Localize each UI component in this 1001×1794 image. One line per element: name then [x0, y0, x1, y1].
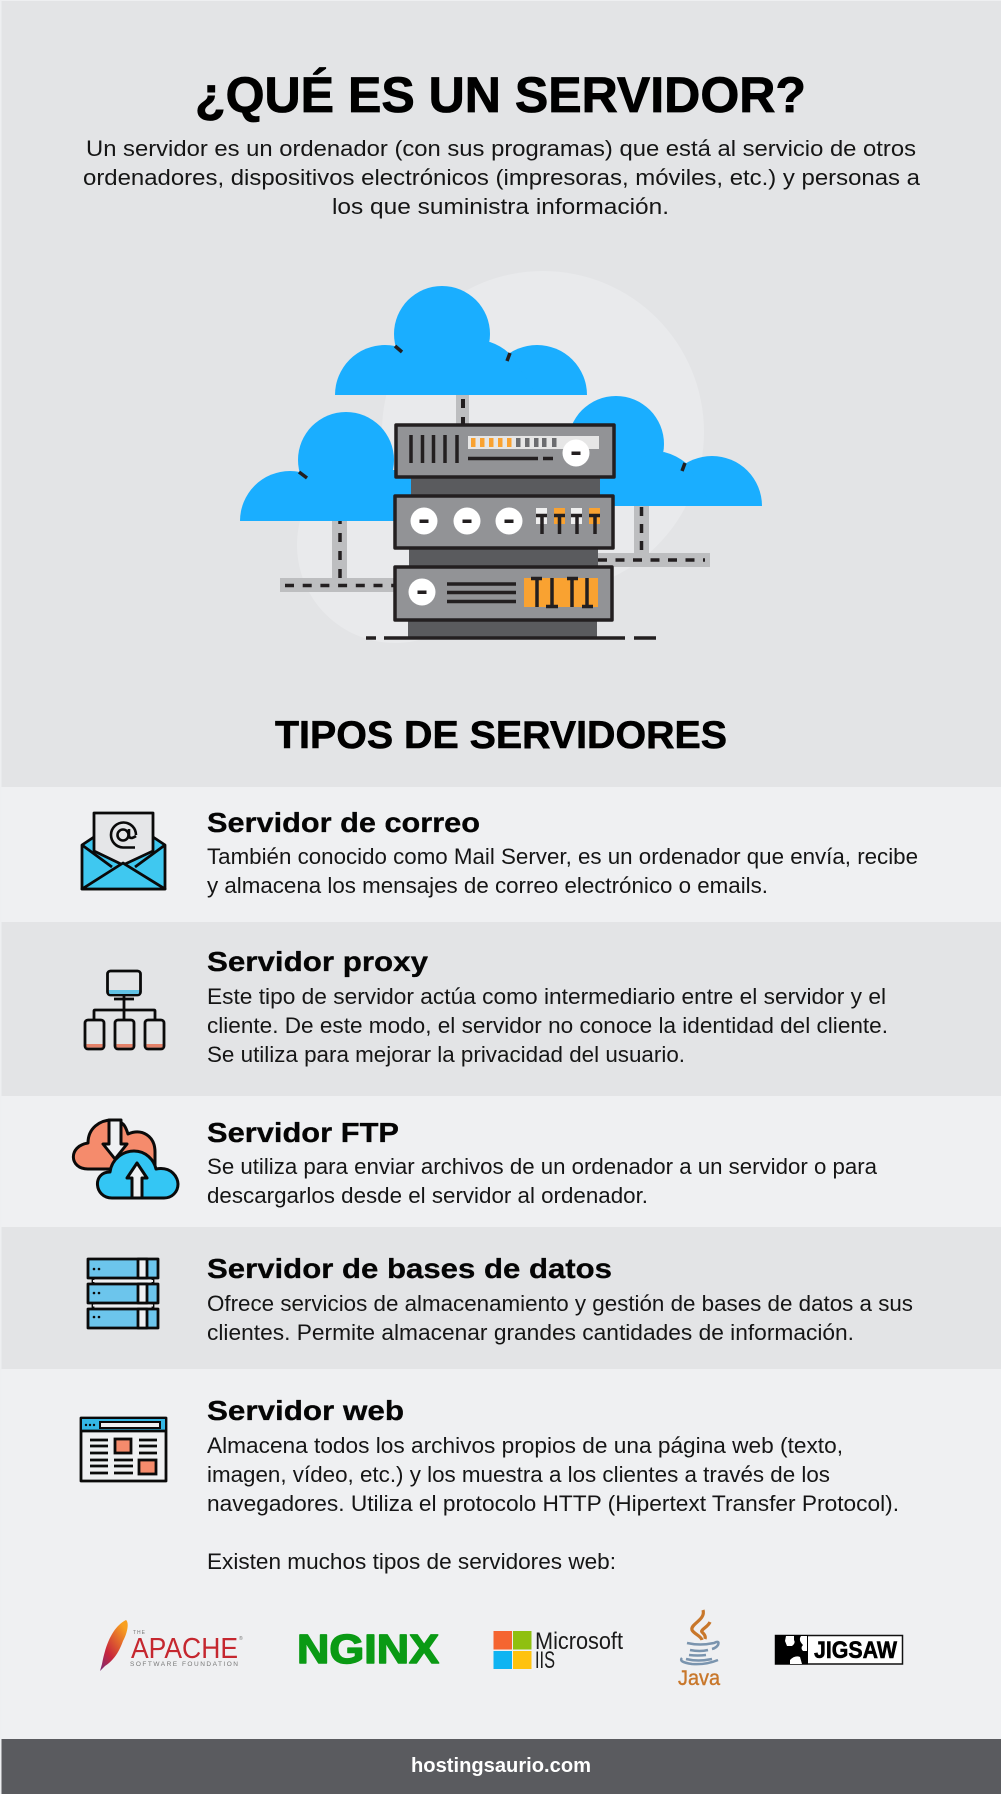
icon: mail envelope [82, 813, 165, 889]
heading: Servidor FTP [207, 1117, 399, 1148]
icon: upload and download clouds [73, 1120, 178, 1198]
icon: network [85, 971, 164, 1049]
heading: Servidor de bases de datos [207, 1253, 612, 1284]
logo: java: Java [678, 1667, 720, 1690]
footer [2, 1739, 1001, 1794]
connector: top cloud [456, 395, 469, 426]
description: También conocido como Mail Server, es un ordenador que envía, recibe [207, 844, 918, 869]
panel: servidor de correo [2, 787, 1001, 922]
panel: servidor ftp [2, 1096, 1001, 1227]
description: navegadores. Utiliza el protocolo HTTP (Hipertext Transfer Protocol). [207, 1491, 899, 1516]
description: Ofrece servicios de almacenamiento y gestión de bases de datos a sus [207, 1291, 913, 1316]
description: Se utiliza para enviar archivos de un ordenador a un servidor o para [207, 1154, 878, 1179]
logo: microsoft iis: IIS [535, 1647, 555, 1674]
icon: database stack [88, 1259, 158, 1328]
description: descargarlos desde el servidor al ordenador. [207, 1183, 648, 1208]
description [207, 1291, 913, 1345]
logo: jigsaw: JIGSAW [814, 1637, 897, 1664]
description [207, 1433, 899, 1516]
heading: Servidor web [207, 1395, 404, 1426]
heading: tipos de servidores: TIPOS DE SERVIDORES [275, 714, 727, 757]
description [207, 984, 888, 1067]
server unit 3 [395, 567, 612, 620]
logo: nginx: NGINX [297, 1626, 439, 1672]
description: Se utiliza para mejorar la privacidad del usuario. [207, 1042, 685, 1067]
intro paragraph: ordenadores, dispositivos electrónicos (impresoras, móviles, etc.) y personas a [83, 165, 921, 190]
panel: servidor proxy [2, 922, 1001, 1096]
web servers intro line: Existen muchos tipos de servidores web: [207, 1549, 616, 1574]
intro paragraph: Un servidor es un ordenador (con sus programas) que está al servicio de otros [86, 136, 916, 161]
logo: microsoft iis: Microsoft [535, 1628, 623, 1655]
logo: apache: ® [239, 1635, 243, 1642]
connector: left cloud [280, 521, 396, 592]
server rack bases [408, 476, 600, 638]
logo: jigsaw [775, 1635, 902, 1664]
logo: java [678, 1610, 720, 1690]
intro paragraph [83, 136, 921, 219]
connector: right cloud [598, 506, 710, 567]
footer: hostingsaurio.com [411, 1755, 591, 1777]
description: Almacena todos los archivos propios de una página web (texto, [207, 1433, 843, 1458]
logo: apache: SOFTWARE FOUNDATION [130, 1661, 238, 1668]
description [207, 844, 918, 898]
description [207, 1154, 878, 1208]
panel: servidor de bases de datos [2, 1227, 1001, 1369]
heading: Servidor proxy [207, 946, 428, 977]
cloud: left [240, 412, 420, 521]
cloud: right [568, 396, 762, 506]
icon: browser window [81, 1418, 166, 1481]
logo: apache: THE [133, 1630, 146, 1636]
description: y almacena los mensajes de correo electrónico o emails. [207, 873, 768, 898]
description: imagen, vídeo, etc.) y los muestra a los clientes a través de los [207, 1462, 830, 1487]
title: ¿QUÉ ES UN SERVIDOR? [195, 67, 806, 123]
illustration: servers and clouds [240, 271, 762, 643]
description: Este tipo de servidor actúa como intermediario entre el servidor y el [207, 984, 886, 1009]
intro paragraph: los que suministra información. [332, 194, 669, 219]
server unit 2 [395, 496, 613, 548]
panel: servidor web [2, 1369, 1001, 1739]
ground line [366, 636, 656, 640]
logo: microsoft iis [494, 1628, 623, 1674]
server unit 1 [396, 425, 614, 477]
logo: apache: APACHE [131, 1633, 238, 1665]
cloud: top [335, 286, 587, 395]
logo: apache [98, 1620, 243, 1678]
heading: Servidor de correo [207, 807, 480, 838]
description: cliente. De este modo, el servidor no conoce la identidad del cliente. [207, 1013, 888, 1038]
description: clientes. Permite almacenar grandes cantidades de información. [207, 1320, 854, 1345]
